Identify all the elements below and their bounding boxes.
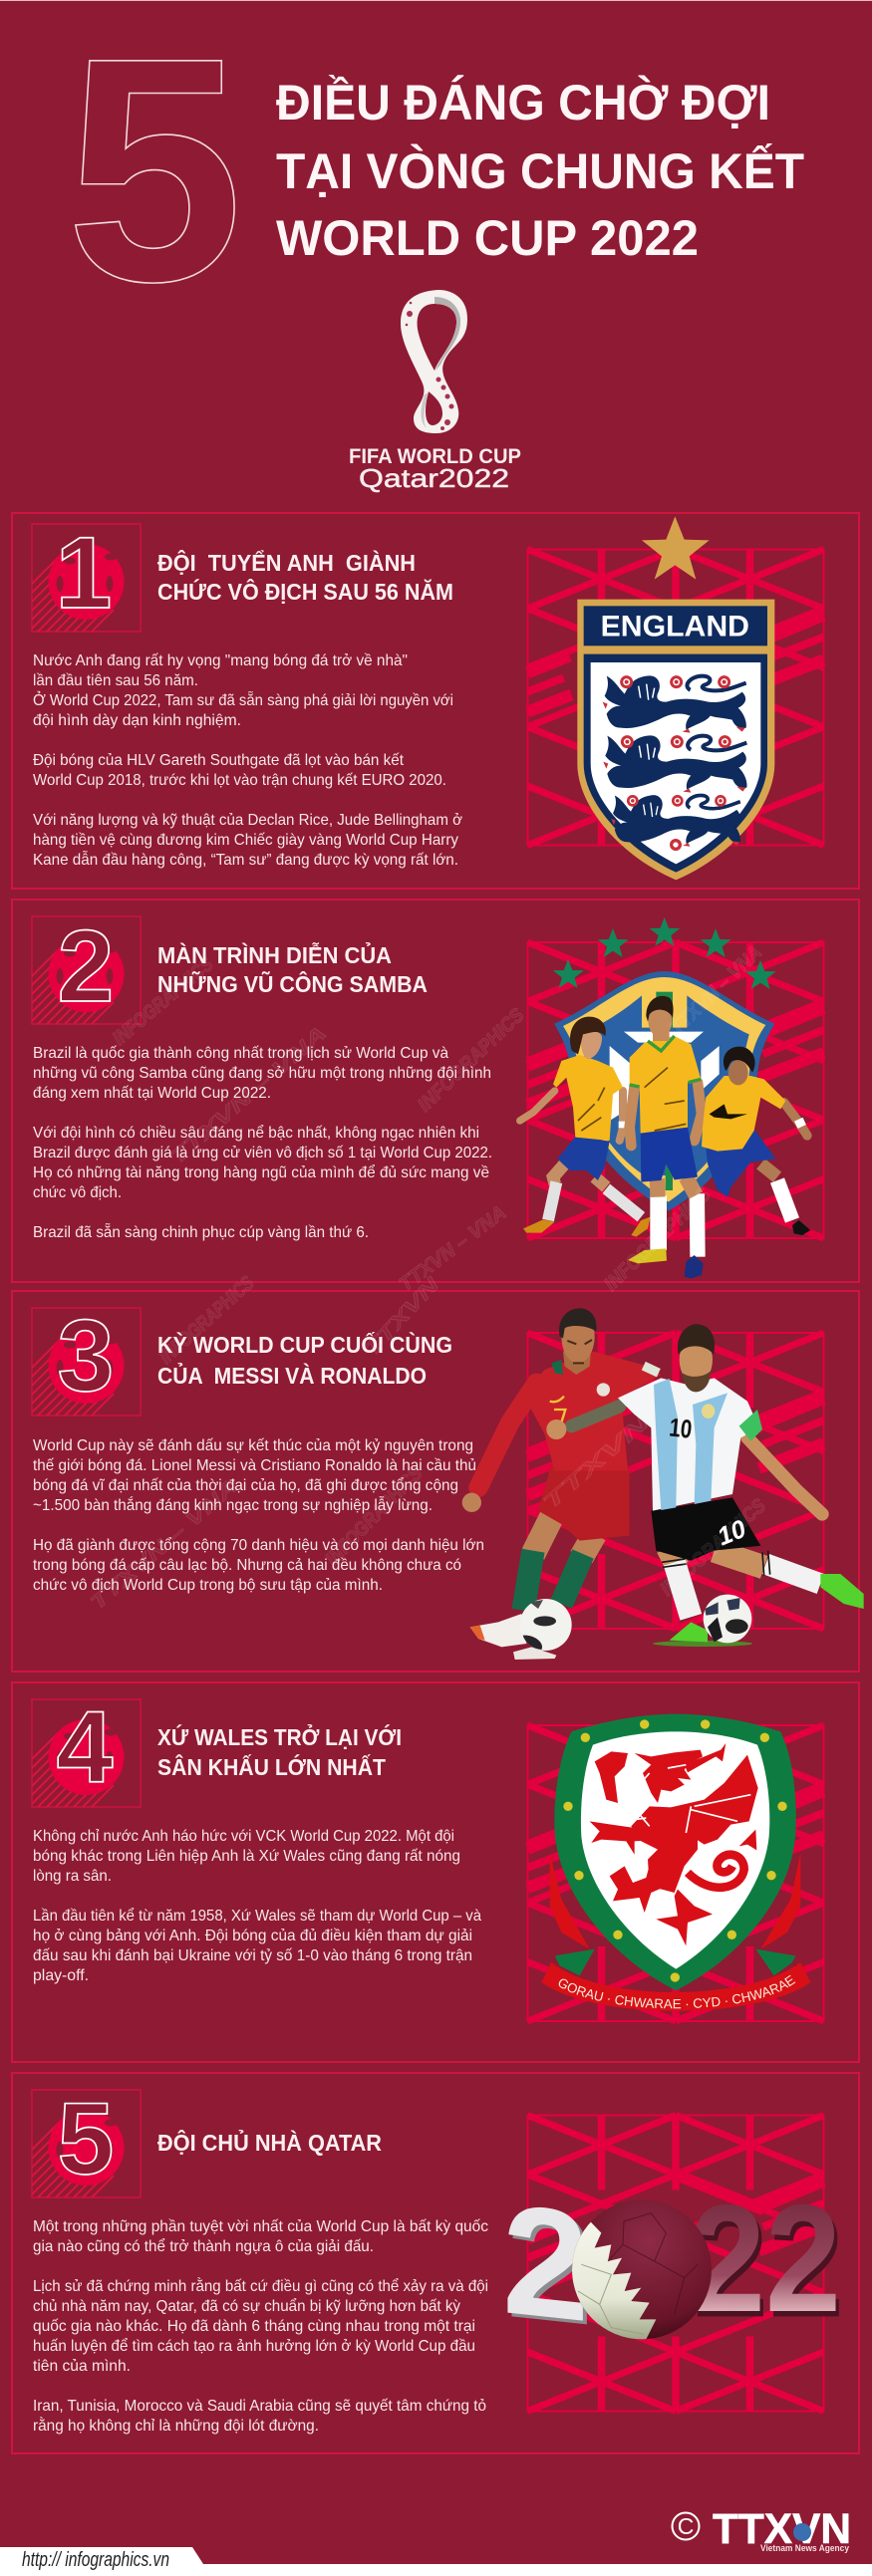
heading 1: CHỨC VÔ ĐỊCH SAU 56 NĂM <box>157 578 453 605</box>
illustration: 2022 with Qatar football <box>507 2199 839 2339</box>
body text 3: World Cup này sẽ đánh dấu sự kết thúc của một kỷ nguyên trong <box>33 1437 473 1454</box>
number badge 4: 4 <box>57 1690 114 1804</box>
body text 5: chủ nhà năm nay, Qatar, đã có sự chuẩn bị kỹ lưỡng hơn bất kỳ <box>33 2297 460 2315</box>
illustration: 2022 with Qatar football: 22 <box>693 2179 844 2349</box>
body text 2: những vũ công Samba cũng đang sở hữu một trong những đội hình <box>33 1065 491 1082</box>
watermarks: TTXVN – VNA <box>87 1475 242 1615</box>
body text 4: bóng khác trong Liên hiệp Anh là Xứ Wales cũng đang rất nóng <box>33 1848 460 1865</box>
body text 2: Họ có những tài năng trong hàng ngũ của mình để đủ sức mang về <box>33 1163 489 1181</box>
illustration: 2022 with Qatar football: 2 <box>502 2172 589 2355</box>
body text 5: Một trong những phần tuyệt vời nhất của World Cup là bất kỳ quốc <box>33 2218 488 2235</box>
body text 1: Ở World Cup 2022, Tam sư đã sẵn sàng phá giải lời nguyền với <box>33 690 453 709</box>
body text 5: gia nào cũng có thể trở thành ngựa ô của giải đấu. <box>33 2237 374 2255</box>
icon: England crest with star <box>577 516 774 880</box>
left player <box>520 1017 651 1237</box>
title: WORLD CUP 2022 <box>276 210 699 266</box>
panel 5: Qatar <box>12 2073 859 2453</box>
large outlined number 5: 5 <box>66 0 243 348</box>
body text 5: Lịch sử đã chứng minh rằng bất cứ điều gì cũng có thể xảy ra và đội <box>33 2276 488 2295</box>
illustration: Ronaldo and Messi <box>462 1308 864 1660</box>
heading 4: SÂN KHẤU LỚN NHẤT <box>157 1753 386 1780</box>
body text 5: rằng họ không chỉ là những đội lót đường. <box>33 2416 319 2435</box>
illustration: Brazil crest and three players <box>520 917 810 1278</box>
pattern backdrop 1 <box>528 550 823 845</box>
pattern backdrop 3 <box>528 1333 823 1629</box>
panel 2: Brazil <box>12 900 859 1282</box>
watermarks: INFOGRAPHICS <box>322 1462 428 1570</box>
panel 4: Wales <box>11 1681 860 2063</box>
watermarks: INFOGRAPHICS <box>155 1272 259 1369</box>
body text 2: Brazil được đánh giá là ứng cử viên vô địch số 1 tại World Cup 2022. <box>33 1145 492 1161</box>
body text 3: ~1.500 bàn thắng đáng kinh ngạc trong sự nghiệp lẫy lừng. <box>33 1495 433 1514</box>
body text 3: bóng đá vĩ đại nhất của thời đại của họ, đã ghi được tổng cộng <box>33 1476 458 1494</box>
footer strip with URL <box>0 2547 872 2576</box>
body text 5: huấn luyện để tìm cách tạo ra ảnh hưởng lớn ở kỳ World Cup đầu <box>33 2337 475 2355</box>
number badge 4 <box>32 1690 141 1807</box>
body text 2: Brazil đã sẵn sàng chinh phục cúp vàng lần thứ 6. <box>33 1222 369 1241</box>
logo: TTXVN copyright: TTXVN <box>713 2505 851 2553</box>
heading 2: NHỮNG VŨ CÔNG SAMBA <box>157 970 428 997</box>
number badge 5 <box>32 2082 141 2197</box>
logo: FIFA World Cup Qatar 2022 <box>349 290 521 493</box>
logo: FIFA World Cup Qatar 2022: FIFA WORLD CUP <box>349 445 521 468</box>
pattern backdrop 2 <box>528 942 823 1238</box>
body text 4: play-off. <box>33 1967 89 1984</box>
watermarks <box>87 941 770 1615</box>
body text 4: đấu sau khi đánh bại Ukraine với tỷ số 1-0 vào tháng 6 trong trận <box>33 1947 472 1964</box>
heading 1: ĐỘI TUYỂN ANH GIÀNH <box>157 549 416 576</box>
heading 2: MÀN TRÌNH DIỄN CỦA <box>157 940 392 968</box>
heading 3: CỦA MESSI VÀ RONALDO <box>157 1361 427 1389</box>
title: TẠI VÒNG CHUNG KẾT <box>276 143 804 199</box>
body text 3: chức vô địch World Cup trong bộ sưu tập của mình. <box>33 1577 383 1594</box>
illustration: 2022 with Qatar football: 22 <box>690 2174 841 2344</box>
footer strip with URL: http:// infographics.vn <box>22 2549 169 2571</box>
body text 1: hàng tiền vệ cùng đương kim Chiếc giày vàng World Cup Harry <box>33 832 458 849</box>
body text 5: tiên của mình. <box>33 2358 131 2375</box>
watermarks: TTXVN – VNA <box>666 941 766 1040</box>
heading 3: KỲ WORLD CUP CUỐI CÙNG <box>157 1331 452 1358</box>
body text 1 <box>33 652 462 869</box>
body text 2 <box>33 1045 492 1241</box>
heading 4: XỨ WALES TRỞ LẠI VỚI <box>157 1722 402 1750</box>
number badge 1 <box>32 516 141 632</box>
watermarks: INFOGRAPHICS <box>414 1004 529 1117</box>
body text 1: World Cup 2018, trước khi lọt vào trận chung kết EURO 2020. <box>33 772 446 789</box>
body text 1: Đội bóng của HLV Gareth Southgate đã lọt vào bán kết <box>33 752 405 769</box>
title <box>276 75 804 266</box>
body text 4: Không chỉ nước Anh háo hức với VCK World Cup 2022. Một đội <box>33 1828 454 1845</box>
stars <box>553 917 776 989</box>
body text 1: lần đầu tiên sau 56 năm. <box>33 672 198 689</box>
body text 4: lòng ra sân. <box>33 1868 112 1885</box>
number badge 1: 1 <box>56 516 112 630</box>
Messi: 10 <box>714 1515 750 1551</box>
number badge 2: 2 <box>58 909 114 1023</box>
body text 3 <box>33 1437 484 1594</box>
logo: FIFA World Cup Qatar 2022: Qatar2022 <box>359 463 509 493</box>
body text 2: chức vô địch. <box>33 1184 122 1201</box>
watermarks: TTXVN <box>539 1411 654 1515</box>
watermarks: TTXVN – VNA <box>396 1201 510 1296</box>
heading 5: ĐỘI CHỦ NHÀ QATAR <box>157 2128 382 2156</box>
watermarks: INFOGRAPHICS <box>600 1183 716 1296</box>
crest <box>554 971 774 1211</box>
icon: England crest with star: ENGLAND <box>601 610 749 643</box>
body text 1: Kane dẫn đầu hàng công, “Tam sư” đang được kỳ vọng rất lớn. <box>33 850 458 869</box>
center player <box>628 996 704 1278</box>
body text 4 <box>33 1828 481 1984</box>
heading 3 <box>157 1331 452 1389</box>
dragon <box>590 1743 758 1945</box>
watermarks: INFOGRAPHICS <box>109 953 218 1050</box>
ball left <box>520 1599 572 1651</box>
body text 3: Họ đã giành được tổng cộng 70 danh hiệu và có mọi danh hiệu lớn <box>33 1536 484 1554</box>
illustration: 2022 with Qatar football: 2 <box>506 2176 593 2359</box>
body text 5 <box>33 2218 488 2435</box>
pattern backdrop 4 <box>528 1725 823 2021</box>
heading 4 <box>157 1722 402 1780</box>
body text 3: thế giới bóng đá. Lionel Messi và Cristiano Ronaldo là hai cầu thủ <box>33 1457 476 1474</box>
body text 3: trong bóng đá cấp câu lạc bộ. Nhưng cả hai đều không chưa có <box>33 1557 461 1574</box>
body text 4: họ ở cùng bảng với Anh. Đội bóng của đủ điều kiện tham dự giải <box>33 1928 472 1944</box>
body text 2: đáng xem nhất tại World Cup 2022. <box>33 1085 271 1102</box>
panel 3: Messi and Ronaldo <box>12 1291 864 1672</box>
panel 1: England <box>12 513 859 889</box>
right player <box>702 1047 810 1235</box>
body text 1: Nước Anh đang rất hy vọng "mang bóng đá trở về nhà" <box>33 652 408 669</box>
logo: TTXVN copyright: C <box>678 2513 694 2539</box>
watermarks: INFOGRAPHICS <box>657 1494 770 1601</box>
Messi <box>546 1324 864 1647</box>
body text 2: Brazil là quốc gia thành công nhất trong lịch sử World Cup và <box>33 1045 448 1062</box>
watermarks: TTXVN <box>361 1273 444 1361</box>
logo: TTXVN copyright: Vietnam News Agency <box>760 2543 850 2554</box>
body text 5: Iran, Tunisia, Morocco và Saudi Arabia cũng sẽ quyết tâm chứng tỏ <box>33 2398 486 2415</box>
number badge 3: 3 <box>58 1299 114 1413</box>
title: ĐIỀU ĐÁNG CHỜ ĐỢI <box>276 75 770 130</box>
icon: Wales crest <box>542 1713 811 2011</box>
body text 5: quốc gia nào khác. Họ đã dành 6 tháng cùng nhau trong một trại <box>33 2318 475 2335</box>
Messi: 10 <box>668 1413 694 1444</box>
body text 1: đội hình dày dạn kinh nghiệm. <box>33 712 241 729</box>
body text 1: Với năng lượng và kỹ thuật của Declan Rice, Jude Bellingham ở <box>33 812 462 829</box>
icon: Wales crest: GORAU · CHWARAE · CYD · CHWARAE <box>558 1974 795 2008</box>
number badge 3 <box>32 1299 141 1416</box>
ball right <box>704 1595 751 1643</box>
number badge 5: 5 <box>58 2082 114 2195</box>
body text 2: Với đội hình có chiều sâu đáng nể bậc nhất, không ngạc nhiên khi <box>33 1124 479 1142</box>
number badge 2 <box>32 909 141 1024</box>
heading 2 <box>157 940 428 997</box>
pattern backdrop 5 <box>528 2116 823 2411</box>
watermarks: TTXVN – VNA <box>166 1022 331 1169</box>
Ronaldo <box>462 1308 661 1660</box>
body text 4: Lần đầu tiên kể từ năm 1958, Xứ Wales sẽ tham dự World Cup – và <box>33 1907 481 1925</box>
football <box>572 2199 712 2339</box>
heading 1 <box>157 549 453 605</box>
